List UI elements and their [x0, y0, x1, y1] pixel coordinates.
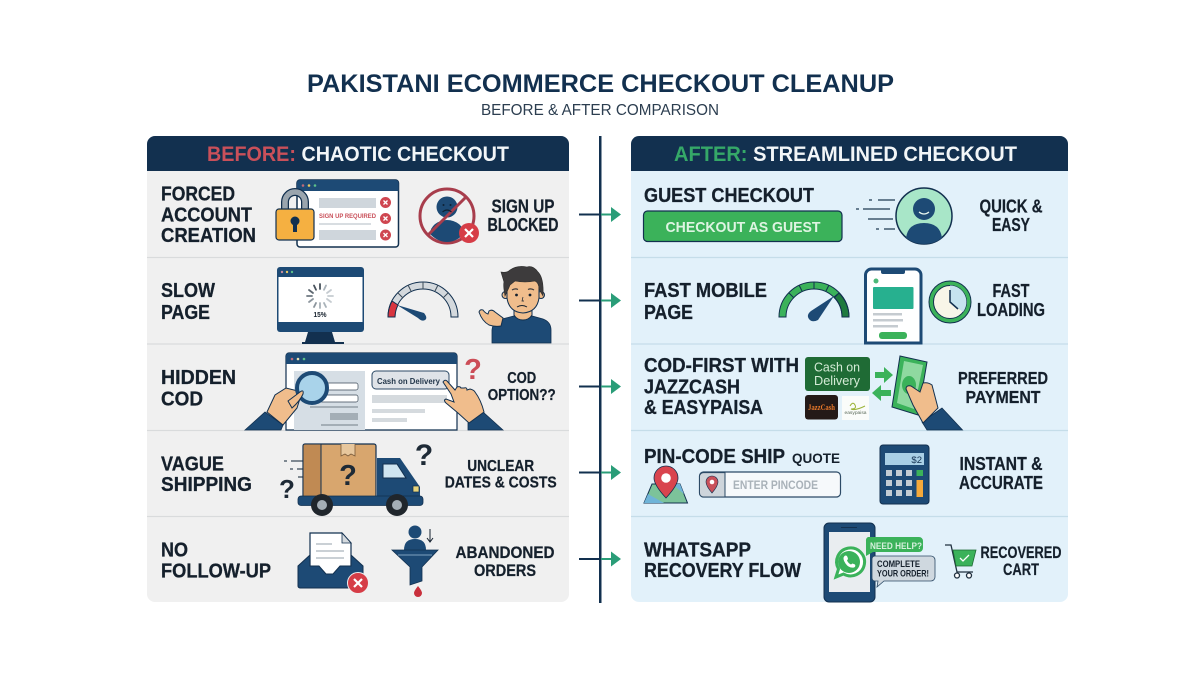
icon: slow gauge — [388, 282, 458, 321]
logo: jazzcash: JazzCash — [808, 403, 835, 412]
badge: cash on delivery: Cash on — [814, 360, 860, 375]
row: vague shipping: DATES & COSTS — [445, 475, 557, 492]
row: fast mobile page: PAGE — [644, 302, 693, 324]
icon: checkout window: Cash on Delivery — [377, 376, 440, 386]
button: checkout as guest — [644, 211, 842, 242]
icon: leaking funnel — [392, 526, 438, 597]
row: hidden cod: OPTION?? — [488, 387, 556, 404]
row: pin code quote: INSTANT & — [960, 454, 1042, 474]
badge: cash on delivery — [805, 357, 870, 391]
icon: delivery truck — [284, 444, 423, 516]
row: no follow-up: FOLLOW-UP — [161, 561, 271, 583]
subtitle: BEFORE & AFTER COMPARISON — [481, 102, 719, 119]
heading: after: AFTER: STREAMLINED CHECKOUT — [674, 142, 1017, 166]
row: pin code quote: QUOTE — [792, 450, 840, 466]
icon: shopping cart — [945, 545, 976, 578]
row: forced account creation: FORCED — [161, 184, 235, 206]
bubble: need help: NEED HELP? — [870, 541, 922, 552]
badge: cash on delivery: Delivery — [814, 373, 860, 388]
input: enter pincode — [700, 472, 840, 497]
icon: fast gauge — [779, 282, 849, 321]
icon: sign up window with lock — [276, 180, 398, 247]
row: pin code quote: ACCURATE — [959, 473, 1043, 493]
row: guest checkout — [644, 185, 1042, 244]
row: whatsapp recovery: WHATSAPP — [644, 540, 751, 562]
bubble: complete your order — [872, 556, 935, 587]
icon: phone with whatsapp — [824, 523, 875, 602]
icon: question marks — [279, 439, 433, 504]
row: vague shipping: VAGUE — [161, 454, 224, 476]
title: PAKISTANI ECOMMERCE CHECKOUT CLEANUP — [307, 70, 894, 98]
icon: clock — [929, 281, 971, 323]
icon: delivery truck: ? — [339, 460, 357, 492]
icon: blocked user — [420, 189, 479, 243]
row: guest checkout: QUICK & — [980, 197, 1042, 217]
row: cod first: PAYMENT — [966, 387, 1041, 407]
row: whatsapp recovery: RECOVERY FLOW — [644, 560, 801, 582]
icon: monitor with spinner — [277, 267, 364, 344]
icon: empty inbox — [298, 533, 368, 594]
icon: happy user with speed lines — [856, 188, 952, 244]
row: no follow-up: ORDERS — [474, 561, 536, 580]
row: cod first: JAZZCASH — [644, 377, 740, 399]
logo: jazzcash — [805, 395, 838, 420]
row: guest checkout: EASY — [992, 215, 1030, 235]
logo: easypaisa: easypaisa — [844, 410, 867, 415]
row: pin code quote — [644, 445, 1043, 504]
row: vague shipping: SHIPPING — [161, 474, 252, 496]
row: fast mobile page: FAST — [992, 281, 1030, 301]
row: forced account creation — [161, 180, 558, 247]
arrows: before to after — [579, 207, 621, 566]
heading: before: BEFORE: CHAOTIC CHECKOUT — [207, 142, 509, 166]
row: cod first — [644, 355, 1048, 430]
row: whatsapp recovery: CART — [1003, 560, 1039, 579]
row: cod first: PREFERRED — [958, 368, 1048, 388]
row: no follow-up — [161, 526, 554, 597]
row: vague shipping — [161, 439, 557, 516]
center divider — [599, 136, 602, 603]
bubble: complete your order: COMPLETE — [877, 559, 920, 569]
icon: question marks: ? — [279, 474, 295, 504]
row: guest checkout: GUEST CHECKOUT — [644, 185, 814, 207]
row: forced account creation: BLOCKED — [488, 215, 558, 235]
bubble: need help — [866, 537, 923, 556]
icon: confused person — [479, 266, 551, 343]
row: forced account creation: ACCOUNT — [161, 205, 252, 227]
row: whatsapp recovery — [644, 523, 1062, 602]
icon: monitor with spinner: 15% — [314, 312, 327, 319]
row: fast mobile page: FAST MOBILE — [644, 280, 767, 302]
row: slow page: PAGE — [161, 302, 210, 324]
row: fast mobile page: LOADING — [977, 300, 1045, 320]
icon: exchange arrows — [872, 367, 893, 401]
row: hidden cod: COD — [507, 370, 536, 387]
icon: phone with page — [866, 269, 921, 343]
row: hidden cod: COD — [161, 389, 203, 411]
row: cod first: & EASYPAISA — [644, 397, 763, 419]
panel: before — [147, 136, 569, 602]
row: vague shipping: UNCLEAR — [467, 458, 535, 475]
icon: calculator — [880, 445, 929, 504]
row: no follow-up: ABANDONED — [456, 543, 554, 562]
icon: hand with magnifier — [245, 373, 327, 430]
bubble: complete your order: YOUR ORDER! — [877, 568, 929, 578]
row: slow page — [161, 266, 551, 344]
row: fast mobile page — [644, 269, 1045, 343]
icon: hand with cash — [892, 356, 962, 430]
icon: checkout window — [286, 353, 457, 430]
row: hidden cod: HIDDEN — [161, 367, 236, 389]
row: pin code quote: PIN-CODE SHIP — [644, 446, 785, 468]
row: no follow-up: NO — [161, 540, 188, 562]
logo: easypaisa — [842, 396, 869, 420]
input: enter pincode: ENTER PINCODE — [733, 478, 818, 492]
icon: calculator: $2 — [911, 455, 922, 466]
icon: pointing hand — [443, 380, 503, 430]
button: checkout as guest: CHECKOUT AS GUEST — [666, 219, 820, 236]
row: slow page: SLOW — [161, 280, 215, 302]
row: forced account creation: SIGN UP — [492, 197, 554, 217]
row: hidden cod — [161, 353, 556, 430]
row: cod first: COD-FIRST WITH — [644, 355, 799, 377]
panel: after — [631, 136, 1068, 602]
icon: map pin — [644, 466, 688, 503]
icon: red question mark: ? — [464, 354, 482, 386]
icon: sign up window with lock: SIGN UP REQUIRED — [319, 213, 376, 220]
row: forced account creation: CREATION — [161, 225, 256, 247]
icon: question marks: ? — [415, 439, 433, 472]
row: whatsapp recovery: RECOVERED — [980, 543, 1062, 562]
